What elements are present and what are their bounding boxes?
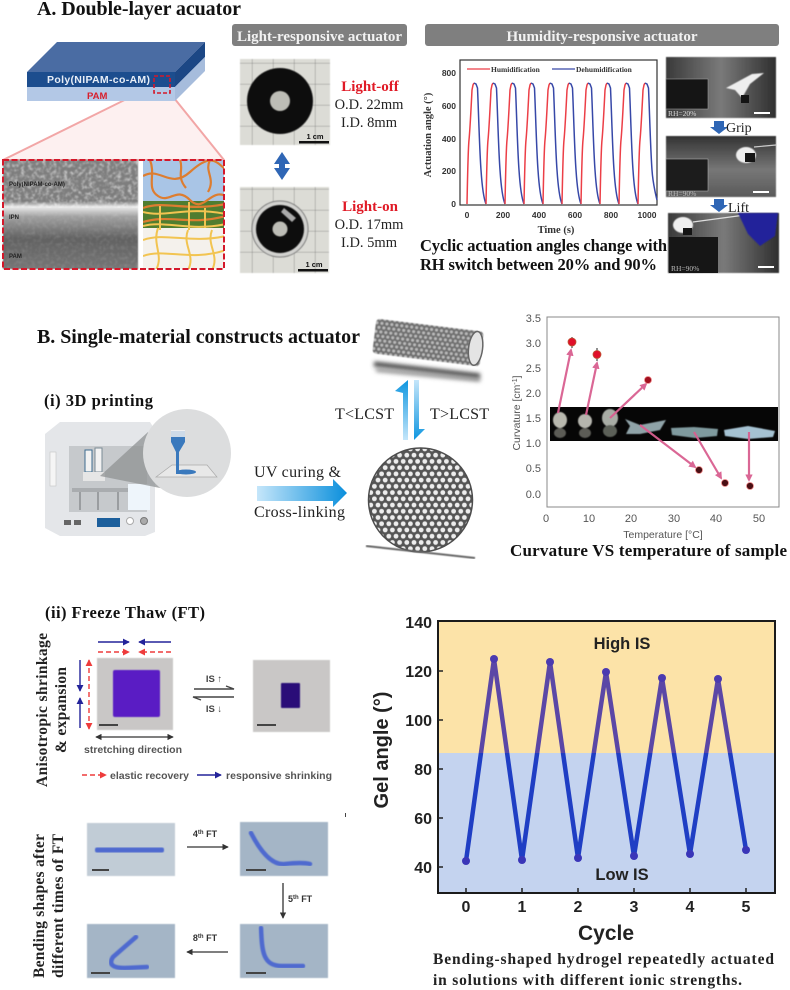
label: UV curing and cross-linking: Cross-linking — [254, 504, 345, 521]
photo: band after 8th FT — [87, 924, 175, 978]
photo: light-on hydrogel disc: 1 cm — [305, 260, 323, 269]
scatter chart: curvature vs temperature — [511, 313, 779, 541]
image: SEM cross-section: IPN — [9, 215, 19, 221]
tick marks — [438, 671, 746, 893]
arrow: 5th FT: FT — [299, 894, 313, 904]
labels: LCST conditions: T>LCST — [430, 406, 489, 423]
arrow: 4th FT: FT — [204, 829, 218, 839]
arrow: 4th FT — [187, 829, 228, 847]
illustration: flat honeycomb disc — [365, 445, 477, 558]
vertical label: bending shapes: Bending shapes after — [31, 834, 48, 978]
text: light-on dimensions: I.D. 5mm — [341, 235, 398, 251]
axes labels: 5 — [742, 899, 751, 916]
axes labels: 40 — [710, 513, 722, 525]
axes labels: -1 — [512, 378, 519, 385]
magnifier circle with nozzle — [143, 409, 231, 497]
axes labels: 4 — [686, 899, 695, 916]
axes labels: 0 — [462, 899, 471, 916]
legend: elastic recovery and responsive shrinking — [82, 770, 332, 782]
axes: ticks and labels: 800 — [442, 68, 456, 78]
arrow: 8th FT: 8 — [193, 933, 198, 943]
magnifier beam — [100, 432, 170, 490]
axes: ticks and labels — [423, 68, 657, 236]
illustration: curled tube state — [372, 319, 485, 380]
heading: 3D printing: (i) 3D printing — [44, 391, 154, 410]
caption: cyclic actuation: Cyclic actuation angles change with — [420, 236, 667, 255]
axes labels: 2 — [574, 899, 583, 916]
title: section B: B. Single-material constructs actuator — [37, 326, 360, 348]
label: stretching direction: stretching direction — [84, 744, 182, 756]
arrow: 5th FT: th — [293, 895, 299, 901]
photo: RH 90% grip: RH=90% — [668, 189, 696, 198]
axes: ticks and labels: Time (s) — [538, 225, 575, 236]
label: grip: Grip — [726, 121, 752, 136]
series: gel angle, low zone — [464, 753, 748, 858]
heading bar: light-responsive actuator: Light-responsive actuator — [237, 29, 402, 45]
arrows: reversible temperature switch — [395, 380, 425, 440]
axes: ticks and labels: 200 — [442, 166, 456, 176]
axes: ticks and labels: 800 — [604, 210, 618, 220]
heading bar: humidity-responsive actuator: Humidity-responsive actuator — [506, 29, 698, 45]
axes labels: 50 — [753, 513, 765, 525]
caption: cyclic actuation — [420, 236, 667, 274]
axes labels: Curvature [cm — [511, 385, 523, 451]
axes labels: 3 — [630, 899, 639, 916]
axes labels: 2.0 — [526, 388, 541, 400]
zone: high ionic strength — [438, 621, 775, 753]
image: SEM cross-section: Poly(NIPAM-co-AM) — [9, 182, 65, 188]
axes labels: 0 — [543, 513, 549, 525]
vertical label: bending shapes: different times of FT — [50, 833, 67, 978]
text: light-off dimensions: Light-off — [341, 79, 400, 95]
arrow: lift step — [710, 199, 728, 212]
axes labels: 0.0 — [526, 489, 541, 501]
line chart: cyclic actuation angle — [423, 60, 657, 236]
series: gel angle, high zone — [478, 662, 732, 753]
image: SEM cross-section — [3, 160, 138, 269]
arrows: shrinkage and recovery directions — [80, 642, 171, 729]
line chart: gel angle vs cycle — [371, 615, 775, 945]
arrow: 8th FT: th — [198, 934, 204, 940]
photo: straight band — [87, 823, 175, 876]
axes: ticks and labels: 600 — [568, 210, 582, 220]
icon: red dashed zoom box — [154, 76, 170, 93]
axes labels: 20 — [625, 513, 637, 525]
axes labels — [511, 313, 765, 541]
labels: LCST conditions: T<LCST — [335, 406, 394, 423]
axes labels: 80 — [414, 762, 432, 779]
arrow: 5th FT — [283, 883, 313, 918]
axes labels: 40 — [414, 860, 432, 877]
zone: low ionic strength — [438, 753, 775, 893]
arrows: ionic strength switch — [193, 674, 234, 715]
axes labels: 120 — [405, 664, 432, 681]
text: light-off dimensions — [335, 79, 404, 131]
series: humidification and dehumidification cycles — [467, 83, 657, 204]
axes labels: Gel angle (°) — [371, 692, 393, 808]
arrow: 8th FT — [187, 933, 228, 952]
axes labels — [371, 615, 751, 945]
photo: RH 90% grip — [666, 136, 776, 198]
axes labels: Cycle — [578, 922, 634, 945]
axes: ticks and labels: 400 — [532, 210, 546, 220]
callout: zoom projection wedge — [3, 85, 224, 160]
axes labels: 30 — [668, 513, 680, 525]
vertical label: anisotropic shrinkage and expansion: & expansion — [53, 667, 70, 753]
photo: shrunken gel — [253, 660, 330, 732]
axes labels: 100 — [405, 713, 432, 730]
heading: freeze thaw: (ii) Freeze Thaw (FT) — [45, 603, 205, 622]
axes: ticks and labels: 600 — [442, 101, 456, 111]
arrows: ionic strength switch: IS ↓ — [206, 704, 222, 715]
axes: ticks and labels: 400 — [442, 134, 456, 144]
data points — [568, 337, 754, 490]
axes labels: 140 — [405, 615, 432, 632]
photo: band after 5th FT — [240, 924, 328, 978]
axes labels: 2.5 — [526, 363, 541, 375]
arrow: 4th FT: th — [198, 830, 204, 836]
axes labels: 3.5 — [526, 313, 541, 325]
label: UV curing and cross-linking: UV curing & — [254, 464, 342, 481]
photo: light-on hydrogel disc — [240, 187, 329, 273]
diagram: bilayer slab with magnified cross-section — [3, 42, 226, 270]
arrow: 8th FT: FT — [204, 933, 218, 943]
legend: humidification / dehumidification — [467, 65, 633, 74]
diagram: anisotropic shrinkage photos — [80, 642, 332, 782]
photo: RH 20%: RH=20% — [668, 109, 696, 118]
frame — [438, 621, 775, 893]
arrow: 5th FT: 5 — [288, 894, 293, 904]
caption: bending-shaped hydrogel: in solutions with different ionic strengths. — [433, 972, 742, 989]
text: light-off dimensions: O.D. 22mm — [335, 97, 404, 113]
arrows: ionic strength switch: IS ↑ — [206, 674, 222, 685]
zone label: low IS: Low IS — [595, 866, 649, 884]
zone label: high IS: High IS — [594, 635, 650, 653]
photo: light-off hydrogel disc: 1 cm — [306, 132, 324, 141]
text: light-on dimensions: Light-on — [342, 199, 399, 215]
data points — [462, 655, 750, 865]
photo: band after 4th FT — [240, 822, 328, 876]
text: light-on dimensions — [335, 199, 404, 251]
photo: RH 90% lift: RH=90% — [671, 264, 699, 273]
photo: light-off hydrogel disc — [240, 59, 330, 145]
axes: ticks and labels: 200 — [496, 210, 510, 220]
axes labels: Temperature [°C] — [623, 529, 703, 541]
photo: expanded gel — [97, 658, 173, 730]
arrow: grip step — [710, 121, 728, 134]
caption: bending-shaped hydrogel: Bending-shaped hydrogel repeatedly actuated — [433, 951, 774, 968]
axes labels: 1.0 — [526, 438, 541, 450]
image: SEM cross-section: PAM — [9, 254, 22, 260]
frame: red dashed inset border — [3, 160, 224, 269]
legend: humidification / dehumidification: Humidification — [491, 65, 541, 74]
axes labels: 10 — [583, 513, 595, 525]
axes: ticks and labels: Actuation angle (°) — [423, 92, 434, 177]
axes: ticks and labels: 0 — [465, 210, 470, 220]
axes labels: 1.5 — [526, 413, 541, 425]
illustration: polymer network schematic — [143, 160, 226, 270]
axes labels: 1 — [518, 899, 527, 916]
arrow: UV curing — [257, 479, 347, 507]
label: lift: Lift — [728, 201, 749, 216]
vertical label: bending shapes — [31, 833, 67, 978]
heading bar: light-responsive actuator — [232, 24, 407, 46]
legend: elastic recovery and responsive shrinking: elastic recovery — [110, 770, 189, 782]
arrow: 4th FT: 4 — [193, 829, 198, 839]
photo sequence: gripper grip and lift — [666, 57, 779, 273]
text: light-off dimensions: I.D. 8mm — [341, 115, 398, 131]
arrow: reversible light switch — [274, 152, 290, 180]
printer body — [45, 422, 155, 536]
heading bar: humidity-responsive actuator — [425, 24, 779, 46]
text: light-on dimensions: O.D. 17mm — [335, 217, 404, 233]
vertical label: anisotropic shrinkage and expansion — [34, 633, 70, 787]
labels: LCST conditions — [335, 406, 489, 423]
illustration: 3D printer with nozzle detail — [45, 409, 231, 536]
label: PAM layer: PAM — [87, 91, 107, 102]
axes labels: 0.5 — [526, 463, 541, 475]
vertical label: anisotropic shrinkage and expansion: Anisotropic shrinkage — [34, 633, 51, 787]
label: UV curing and cross-linking — [254, 464, 345, 521]
caption: curvature vs temperature: Curvature VS temperature of sample — [510, 541, 787, 560]
axes: ticks and labels: 1000 — [638, 210, 657, 220]
legend: humidification / dehumidification: Dehumidification — [576, 65, 633, 74]
axes labels: ] — [511, 375, 523, 378]
slab: layered block — [27, 42, 205, 102]
axes labels: 60 — [414, 811, 432, 828]
legend: elastic recovery and responsive shrinking: responsive shrinking — [226, 770, 332, 782]
arrows: pink sample-to-point connectors — [558, 350, 749, 480]
photo: RH 90% lift — [668, 213, 779, 273]
arrow: stretching direction — [96, 736, 173, 738]
caption: cyclic actuation: RH switch between 20% and 90% — [420, 255, 657, 274]
axes: ticks and labels: 0 — [451, 199, 456, 209]
label: Poly(NIPAM-co-AM) layer: Poly(NIPAM-co-AM) — [47, 74, 150, 86]
caption: bending-shaped hydrogel — [433, 951, 774, 989]
photo: RH 20% — [666, 57, 776, 118]
axes labels: 3.0 — [526, 338, 541, 350]
band: sample photographs — [550, 407, 778, 441]
